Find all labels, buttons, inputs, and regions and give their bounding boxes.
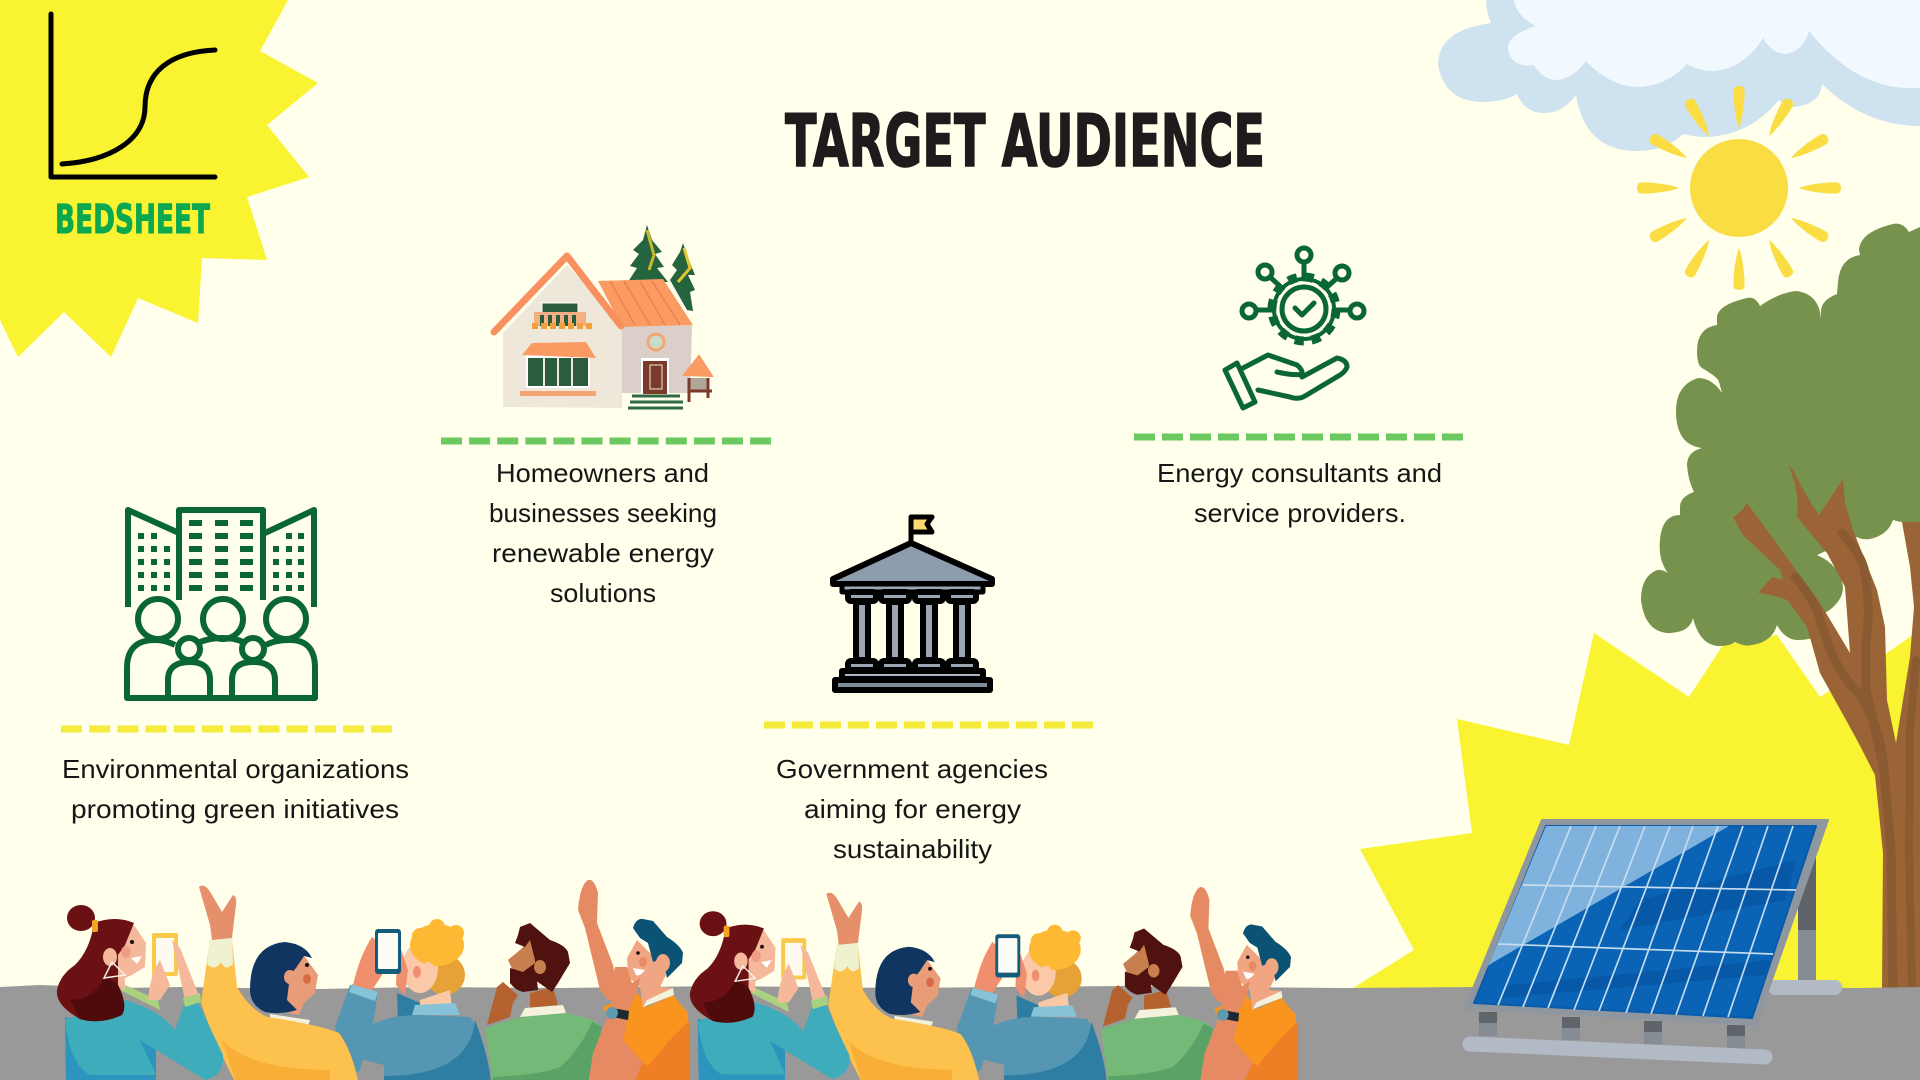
crowd: left group of people xyxy=(57,880,690,1080)
tree canopy xyxy=(1641,224,1920,646)
panel dark bands xyxy=(1500,860,1796,998)
text: environmental: Environmental organizations xyxy=(62,754,409,784)
house roof xyxy=(598,279,693,327)
panel glass xyxy=(1474,826,1816,1018)
text: homeowners: solutions xyxy=(550,578,656,608)
icon: buildings and people xyxy=(127,510,315,698)
text: homeowners: renewable energy xyxy=(492,538,714,568)
dashed divider: government xyxy=(764,722,1093,728)
yellow sunburst: top left xyxy=(0,0,318,357)
front rail xyxy=(1470,1044,1765,1057)
cloud xyxy=(1438,0,1920,151)
text: environmental: promoting green initiatives xyxy=(71,794,399,824)
logo: S-curve chart xyxy=(51,14,215,177)
yellow sunburst: bottom right xyxy=(1350,630,1920,990)
small pavilion xyxy=(684,356,712,402)
title: TARGET AUDIENCE xyxy=(785,99,1265,183)
ground xyxy=(0,985,1920,1080)
house door and round window xyxy=(628,334,683,408)
person: man in green xyxy=(485,923,602,1080)
building outlines xyxy=(128,510,314,607)
icon: gear on hand xyxy=(1225,248,1364,408)
front legs xyxy=(1479,1012,1745,1050)
house lower window xyxy=(520,342,596,396)
crowd: right group of people xyxy=(690,887,1298,1080)
logo wordmark: BEDSHEET xyxy=(55,197,210,243)
sun xyxy=(1637,86,1841,290)
house balcony xyxy=(532,303,592,326)
text: government: sustainability xyxy=(833,834,992,864)
trees behind house xyxy=(628,225,695,311)
building windows xyxy=(138,520,304,591)
text: environmental xyxy=(62,754,409,824)
dashed divider: environmental xyxy=(61,726,392,732)
panel grid lines xyxy=(1498,826,1796,1017)
tree xyxy=(1641,224,1920,990)
text: government: aiming for energy xyxy=(804,794,1021,824)
panel reflection xyxy=(1488,826,1729,966)
text: consultants: Energy consultants and xyxy=(1157,458,1442,488)
text: homeowners xyxy=(489,458,717,608)
text: consultants: service providers. xyxy=(1194,498,1406,528)
person: man in blue with phone xyxy=(335,919,491,1080)
text: homeowners: Homeowners and xyxy=(496,458,709,488)
tree trunk and branches xyxy=(1733,465,1920,990)
icon: house xyxy=(494,225,712,408)
house walls xyxy=(503,265,622,408)
back support post xyxy=(1798,853,1816,930)
dashed divider: homeowners xyxy=(441,438,771,444)
text: homeowners: businesses seeking xyxy=(489,498,717,528)
panel frame xyxy=(1465,820,1828,1025)
text: consultants xyxy=(1157,458,1442,528)
person: woman in yellow with raised hand xyxy=(199,886,359,1080)
trunk shading xyxy=(1795,533,1916,990)
solar panel xyxy=(1465,820,1842,1057)
text: government xyxy=(776,754,1048,864)
family figures xyxy=(127,599,315,698)
icon: government building xyxy=(833,517,992,690)
person: man in orange with raised arm xyxy=(578,880,690,1080)
text: government: Government agencies xyxy=(776,754,1048,784)
person: woman in teal with phone xyxy=(57,905,223,1080)
dashed divider: consultants xyxy=(1134,434,1463,440)
back rail xyxy=(1768,980,1842,995)
